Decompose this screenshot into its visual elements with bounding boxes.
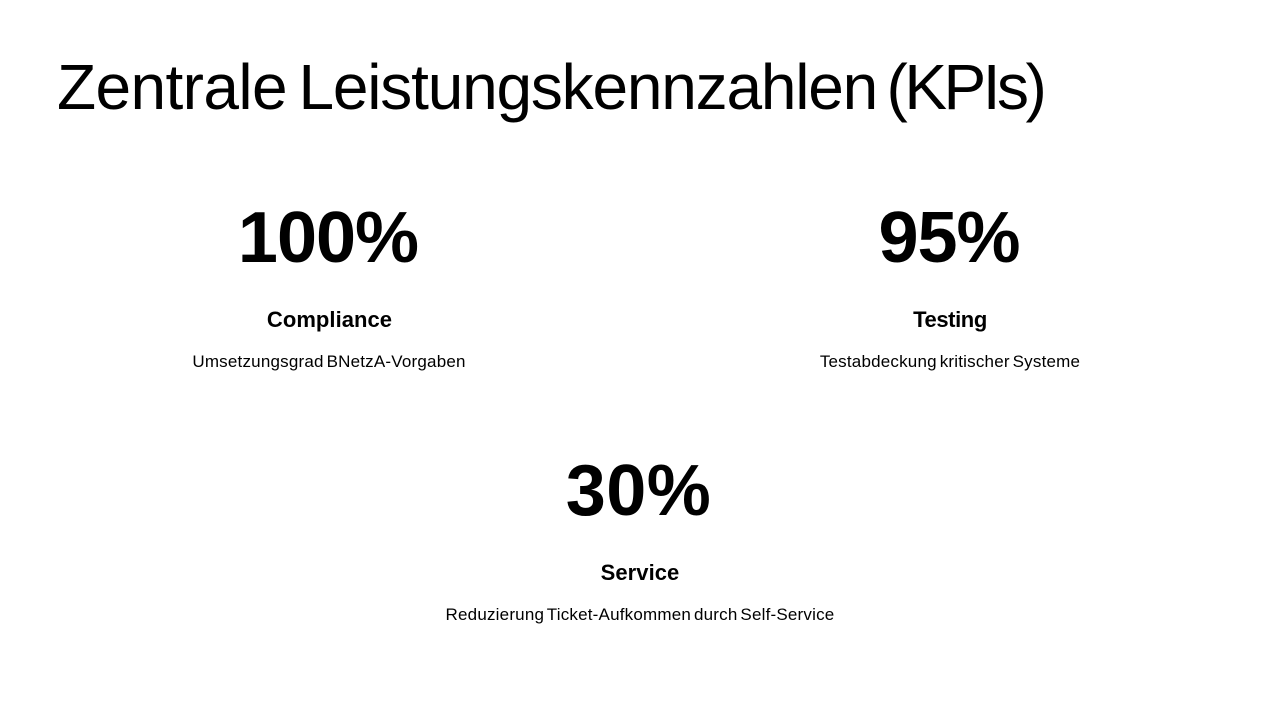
title: Leistungskennzahlen	[298, 51, 877, 123]
panel: Service KPI	[446, 451, 834, 624]
description: Testing: Testabdeckung kritischer Systeme	[820, 352, 1080, 371]
title: (KPIs)	[886, 51, 1043, 123]
label: Service: Service	[601, 560, 679, 585]
panel: Testing KPI	[820, 198, 1080, 371]
label: Compliance: Compliance	[267, 307, 392, 332]
value: 95%: 95%	[878, 198, 1020, 278]
description: Compliance: Umsetzungsgrad BNetzA-Vorgaben	[192, 352, 466, 371]
panel: Compliance KPI	[192, 198, 466, 371]
title: Zentrale	[57, 51, 287, 123]
title	[57, 51, 1043, 123]
value: 30%: 30%	[566, 451, 711, 531]
value: 100%: 100%	[238, 198, 418, 278]
description: Service: Reduzierung Ticket-Aufkommen durch Self-Service	[446, 605, 834, 624]
label: Testing: Testing	[913, 307, 987, 332]
